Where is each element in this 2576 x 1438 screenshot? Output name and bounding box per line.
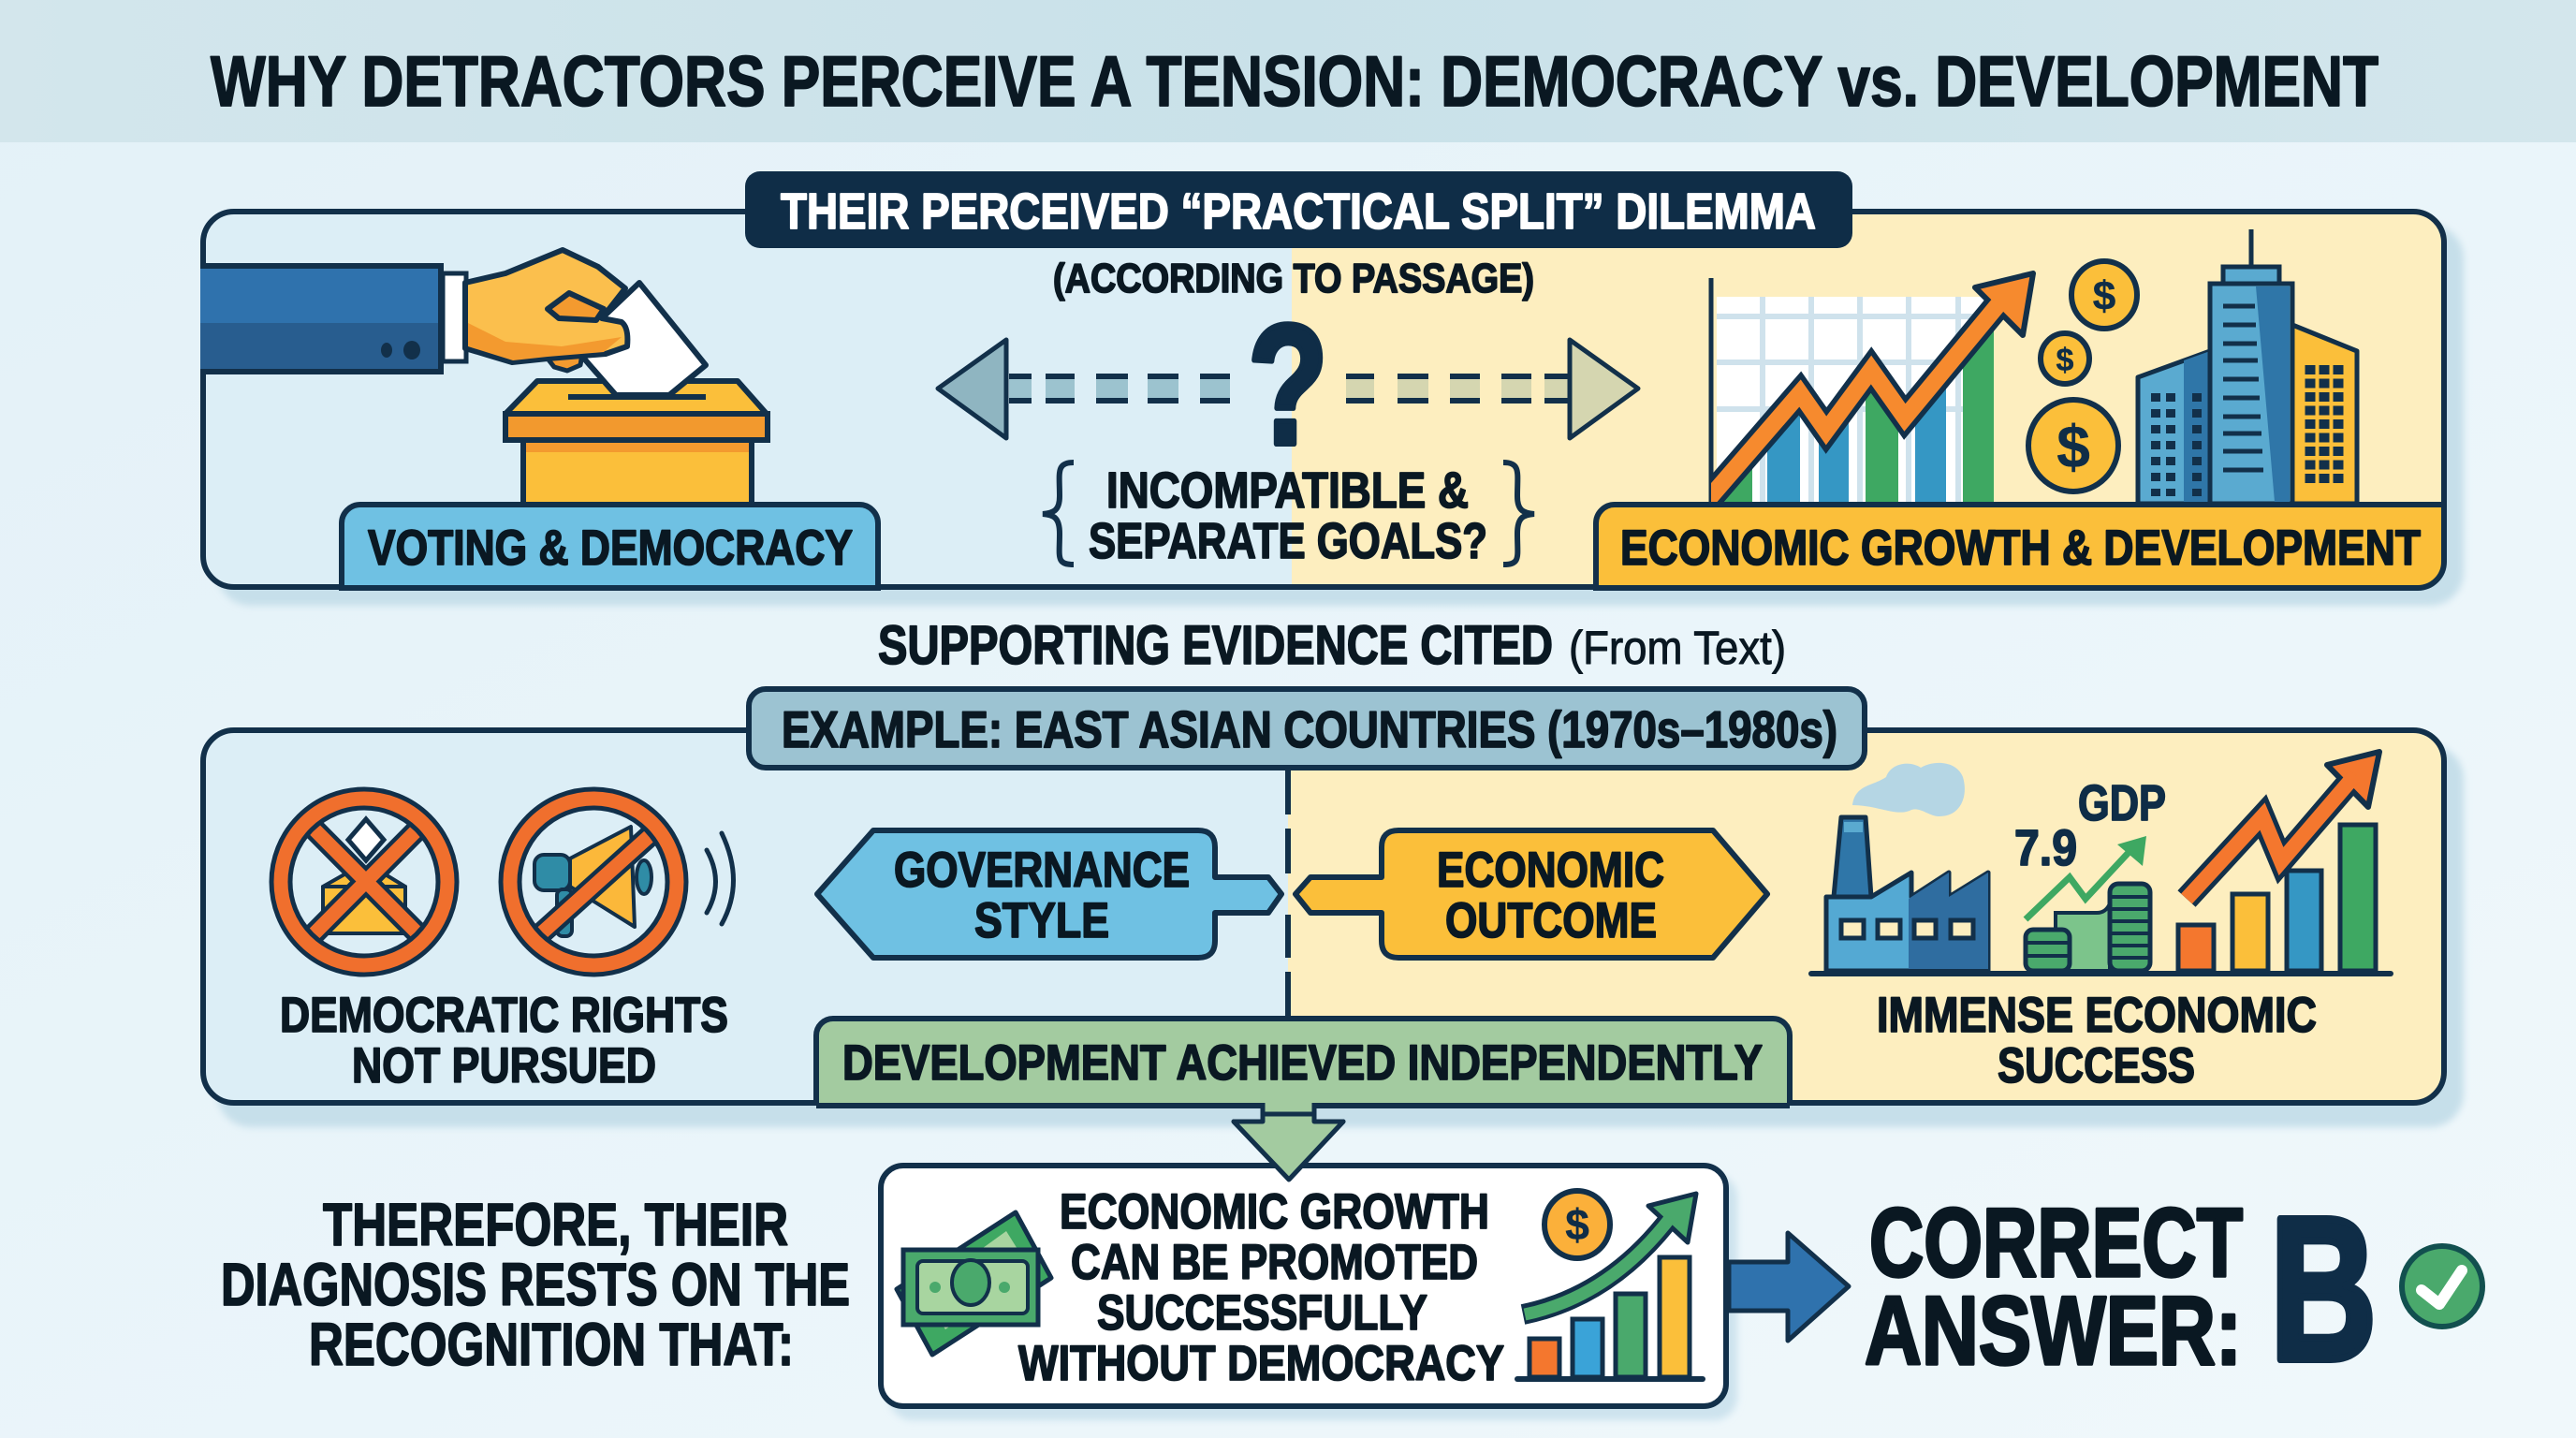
- icon: rising bar chart: [1811, 752, 2391, 974]
- text: incompatible and separate goals: INCOMPATIBLE &: [1106, 462, 1469, 519]
- text: incompatible and separate goals: SEPARATE GOALS?: [1089, 513, 1487, 569]
- icon: rising bars and curved arrow: [1517, 1194, 1703, 1379]
- icon: ballot box: [505, 381, 768, 506]
- text: therefore diagnosis: RECOGNITION THAT:: [309, 1311, 794, 1378]
- text: immense economic success: [1877, 988, 2317, 1093]
- arrow: development down to conclusion: [1234, 1095, 1343, 1180]
- icon: question mark: ?: [1248, 288, 1328, 480]
- icon: dollar coins: $: [2056, 413, 2090, 480]
- text: incompatible and separate goals: [1043, 462, 1534, 569]
- heading pill: perceived dilemma: [745, 171, 1852, 248]
- icon: GDP coin stacks: GDP: [2078, 775, 2166, 831]
- heading pill: example: [749, 689, 1865, 768]
- pill: development achieved independently: [816, 1019, 1790, 1123]
- label: voting and democracy: VOTING & DEMOCRACY: [368, 521, 853, 576]
- text: economic growth without democracy: CAN BE PROMOTED: [1071, 1235, 1478, 1290]
- divider: dashed split: [1285, 770, 1291, 1019]
- icon: hand casting ballot: [200, 250, 706, 395]
- text: correct answer: ANSWER:: [1865, 1277, 2242, 1386]
- tag: economic outcome: OUTCOME: [1445, 893, 1657, 948]
- text: economic growth without democracy: [1018, 1184, 1504, 1391]
- icon: dollar coins: [2028, 261, 2137, 492]
- text: therefore diagnosis: THEREFORE, THEIR: [323, 1191, 788, 1258]
- icon: no voting: [281, 799, 447, 965]
- tag: economic outcome: ECONOMIC: [1437, 843, 1664, 898]
- panel: east asian example: [200, 689, 2464, 1180]
- label: economic growth and development: [1596, 505, 2444, 588]
- icon: dollar coins: $: [2056, 343, 2074, 378]
- text: democratic rights not pursued: NOT PURSUED: [352, 1038, 656, 1093]
- tag: governance style: GOVERNANCE: [894, 843, 1190, 898]
- subheading: according to passage: (ACCORDING TO PASSAGE): [1053, 256, 1534, 301]
- text: correct answer: [1865, 1189, 2243, 1386]
- icon: growth chart: [1698, 273, 2033, 511]
- text: immense economic success: SUCCESS: [1998, 1038, 2195, 1093]
- text: immense economic success: IMMENSE ECONOMIC: [1877, 988, 2317, 1043]
- tag: governance style: [817, 830, 1281, 958]
- icon: dollar coins: $: [2093, 273, 2115, 319]
- heading pill: example: EXAMPLE: EAST ASIAN COUNTRIES (1970s–1980s): [782, 700, 1837, 758]
- icon: arrow tip over box: [1234, 1114, 1343, 1180]
- icon: GDP coin stacks: [2014, 775, 2166, 971]
- text: economic growth without democracy: SUCCESSFULLY: [1097, 1285, 1427, 1341]
- section heading: supporting evidence: SUPPORTING EVIDENCE CITED: [878, 615, 1553, 676]
- text: economic growth without democracy: ECONOMIC GROWTH: [1060, 1184, 1489, 1240]
- icon: no megaphone: [510, 799, 677, 965]
- icon: GDP coin stacks: 7.9: [2014, 820, 2077, 876]
- icon: dollar coin: [1544, 1191, 1610, 1258]
- tag: economic outcome: [1295, 830, 1767, 958]
- icon: dollar coin: $: [1565, 1200, 1589, 1249]
- panel: conclusion box: [881, 1114, 1737, 1420]
- text: therefore diagnosis: [221, 1191, 850, 1378]
- section heading: supporting evidence: (From Text): [1569, 622, 1786, 674]
- label: economic growth and development: ECONOMIC GROWTH & DEVELOPMENT: [1620, 521, 2421, 576]
- text: economic growth without democracy: WITHOUT DEMOCRACY: [1018, 1336, 1504, 1391]
- icon: city buildings: [2138, 229, 2357, 504]
- tag: governance style: STYLE: [974, 893, 1109, 948]
- header band: [0, 0, 2576, 142]
- icon: green check: [2402, 1246, 2482, 1327]
- text: democratic rights not pursued: [280, 988, 728, 1093]
- answer letter B: B: [2270, 1176, 2377, 1403]
- text: therefore diagnosis: DIAGNOSIS RESTS ON THE: [221, 1251, 850, 1318]
- icon: factory with smoke: [1826, 763, 1988, 971]
- arrow: dashed left: [938, 340, 1230, 438]
- pill: development achieved independently: DEVELOPMENT ACHIEVED INDEPENDENTLY: [842, 1035, 1763, 1091]
- icon: sound waves: [707, 833, 734, 924]
- label: voting and democracy: [342, 505, 878, 588]
- heading pill: perceived dilemma: THEIR PERCEIVED “PRACTICAL SPLIT” DILEMMA: [781, 183, 1816, 240]
- arrow: to correct answer: [1729, 1233, 1849, 1341]
- arrow: dashed right: [1346, 340, 1638, 438]
- text: democratic rights not pursued: DEMOCRATIC RIGHTS: [280, 988, 728, 1043]
- icon: banknotes: [897, 1212, 1051, 1355]
- panel: practical split dilemma: [200, 171, 2464, 606]
- text: correct answer: CORRECT: [1869, 1189, 2243, 1298]
